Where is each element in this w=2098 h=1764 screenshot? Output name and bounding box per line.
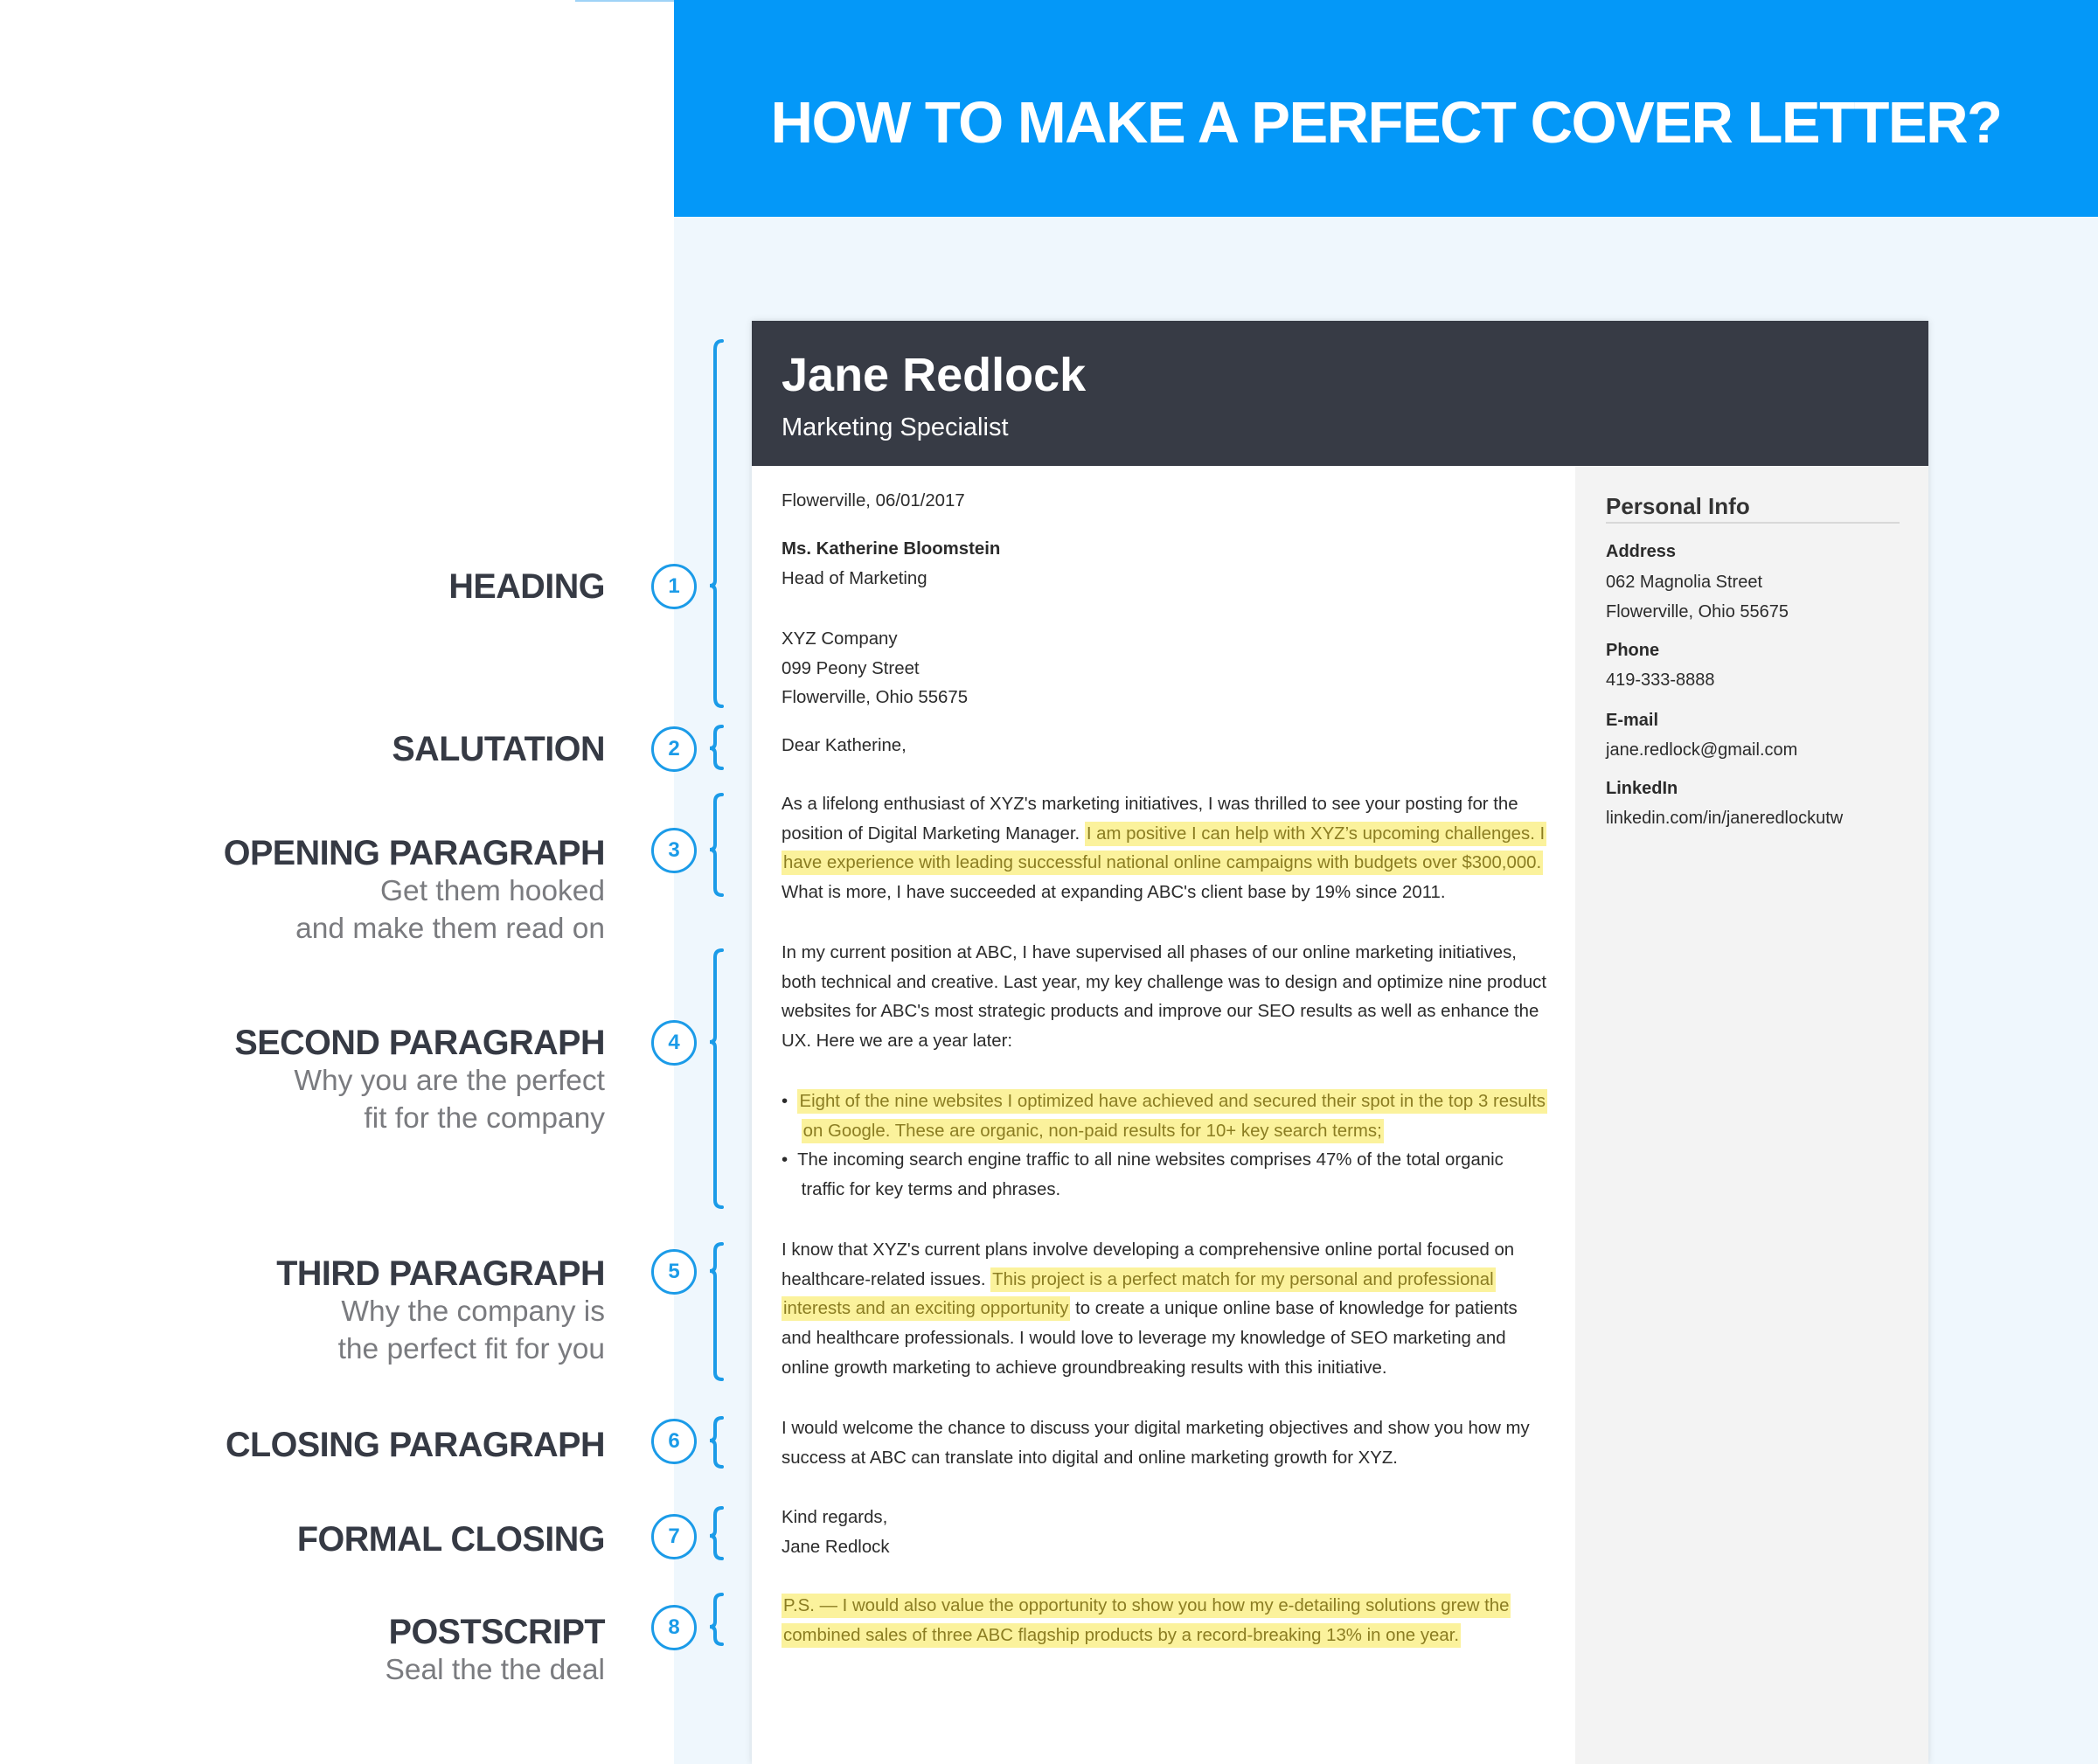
letter body: position of Digital Marketing Manager. I am positive I can help with XYZ’s upcoming challenges. I [782, 824, 1545, 844]
letter header: name and title: Marketing Specialist [782, 413, 1009, 441]
sidebar: personal info: 062 Magnolia Street [1606, 573, 1762, 592]
letter body: Dear Katherine, [782, 736, 907, 755]
label 8: postscript: Seal the the deal [386, 1654, 605, 1686]
letter body: 099 Peony Street [782, 659, 920, 678]
letter body: Flowerville, 06/01/2017 [782, 491, 965, 510]
letter body: Kind regards, [782, 1508, 887, 1527]
light background area [674, 217, 2098, 1764]
letter body: I know that XYZ's current plans involve developing a comprehensive online portal focused on [782, 1240, 1514, 1260]
circle 2: 2 [668, 737, 680, 760]
label 5: third paragraph: THIRD PARAGRAPH [276, 1254, 605, 1293]
circle 2 [651, 726, 697, 772]
label 4: second paragraph: Why you are the perfect [294, 1065, 605, 1097]
letter body: have experience with leading successful national online campaigns with budgets over $300,000. [783, 853, 1541, 872]
label 6: closing paragraph: CLOSING PARAGRAPH [226, 1426, 605, 1464]
letter body: combined sales of three ABC flagship products by a record-breaking 13% in one year. [783, 1626, 1459, 1645]
letter body: UX. Here we are a year later: [782, 1031, 1012, 1051]
label 3: opening paragraph: OPENING PARAGRAPH [224, 834, 605, 872]
sidebar: personal info: linkedin.com/in/janeredlockutw [1606, 809, 1843, 828]
letter body: Jane Redlock [782, 1538, 890, 1557]
circle 5: 5 [668, 1260, 680, 1283]
label 4: second paragraph: fit for the company [364, 1102, 605, 1135]
circle 1 [651, 564, 697, 609]
circle 5 [651, 1249, 697, 1295]
circle 6: 6 [668, 1429, 680, 1453]
label 2: salutation: SALUTATION [392, 730, 605, 768]
sidebar: personal info: Flowerville, Ohio 55675 [1606, 602, 1789, 622]
label 8: postscript [386, 1613, 605, 1686]
circle 3 [651, 828, 697, 873]
letter body [782, 491, 1547, 1648]
label 5: third paragraph [276, 1254, 605, 1365]
sidebar panel [1575, 466, 1928, 1764]
letter body: P.S. — I would also value the opportunity to show you how my e-detailing solutions grew the [783, 1596, 1509, 1615]
letter body: websites for ABC's most strategic products and improve our SEO results as well as enhance the [782, 1002, 1539, 1021]
letter body: Head of Marketing [782, 569, 927, 588]
circle 8: 8 [668, 1615, 680, 1639]
label 3: opening paragraph: Get them hooked [380, 875, 605, 907]
letter header: name and title: Jane Redlock [782, 349, 1086, 401]
letter header: name and title [752, 321, 1928, 466]
label 5: third paragraph: the perfect fit for you [338, 1333, 605, 1365]
blue header band [674, 0, 2098, 217]
letter body: As a lifelong enthusiast of XYZ's marketing initiatives, I was thrilled to see your posting for the [782, 795, 1518, 814]
letter body: Flowerville, Ohio 55675 [782, 688, 968, 707]
circle 4 [651, 1020, 697, 1066]
label 3: opening paragraph [224, 834, 605, 945]
circle 4: 4 [668, 1031, 680, 1054]
letter body: I would welcome the chance to discuss your digital marketing objectives and show you how my [782, 1419, 1530, 1438]
label 5: third paragraph: Why the company is [341, 1295, 605, 1328]
sidebar: personal info [1605, 493, 1900, 828]
letter body: both technical and creative. Last year, my key challenge was to design and optimize nine product [782, 973, 1546, 992]
letter body: In my current position at ABC, I have supervised all phases of our online marketing initiatives, [782, 943, 1517, 962]
letter card [752, 321, 1928, 1764]
letter body: on Google. These are organic, non-paid results for 10+ key search terms; [803, 1122, 1382, 1141]
sidebar: personal info: LinkedIn [1606, 779, 1678, 798]
label 8: postscript: POSTSCRIPT [389, 1613, 605, 1651]
label 3: opening paragraph: and make them read on [295, 913, 605, 945]
circle 7: 7 [668, 1524, 680, 1548]
circle 1: 1 [668, 574, 680, 598]
letter body: Ms. Katherine Bloomstein [782, 539, 1000, 559]
letter body: healthcare-related issues. This project is a perfect match for my personal and professional [782, 1270, 1494, 1289]
label 7: formal closing: FORMAL CLOSING [297, 1520, 605, 1559]
label 4: second paragraph [234, 1024, 605, 1135]
sidebar: personal info: jane.redlock@gmail.com [1606, 740, 1797, 760]
sidebar: personal info: 419-333-8888 [1606, 670, 1715, 690]
letter body: online growth marketing to achieve groundbreaking results with this initiative. [782, 1358, 1387, 1378]
sidebar: personal info: E-mail [1606, 711, 1658, 730]
letter body: and healthcare professionals. I would love to leverage my knowledge of SEO marketing and [782, 1329, 1506, 1348]
sidebar: personal info: Personal Info [1606, 493, 1750, 519]
letter body: interests and an exciting opportunity to create a unique online base of knowledge for patients [783, 1299, 1518, 1318]
letter body: • Eight of the nine websites I optimized have achieved and secured their spot in the top 3 results [782, 1092, 1546, 1111]
circle 6 [651, 1419, 697, 1464]
letter body: XYZ Company [782, 629, 898, 649]
letter body: success at ABC can translate into digital and online marketing growth for XYZ. [782, 1448, 1398, 1468]
label 4: second paragraph: SECOND PARAGRAPH [234, 1024, 605, 1062]
title: HOW TO MAKE A PERFECT COVER LETTER? [771, 90, 2001, 156]
circle 3: 3 [668, 838, 680, 862]
circle 7 [651, 1514, 697, 1559]
letter body: • The incoming search engine traffic to all nine websites comprises 47% of the total organic [782, 1150, 1504, 1170]
letter body: traffic for key terms and phrases. [802, 1180, 1060, 1199]
sidebar: personal info: Phone [1606, 641, 1659, 660]
label 1: heading: HEADING [448, 567, 605, 606]
letter body: What is more, I have succeeded at expanding ABC's client base by 19% since 2011. [782, 883, 1446, 902]
circle 8 [651, 1605, 697, 1650]
sidebar: personal info: Address [1606, 542, 1676, 561]
